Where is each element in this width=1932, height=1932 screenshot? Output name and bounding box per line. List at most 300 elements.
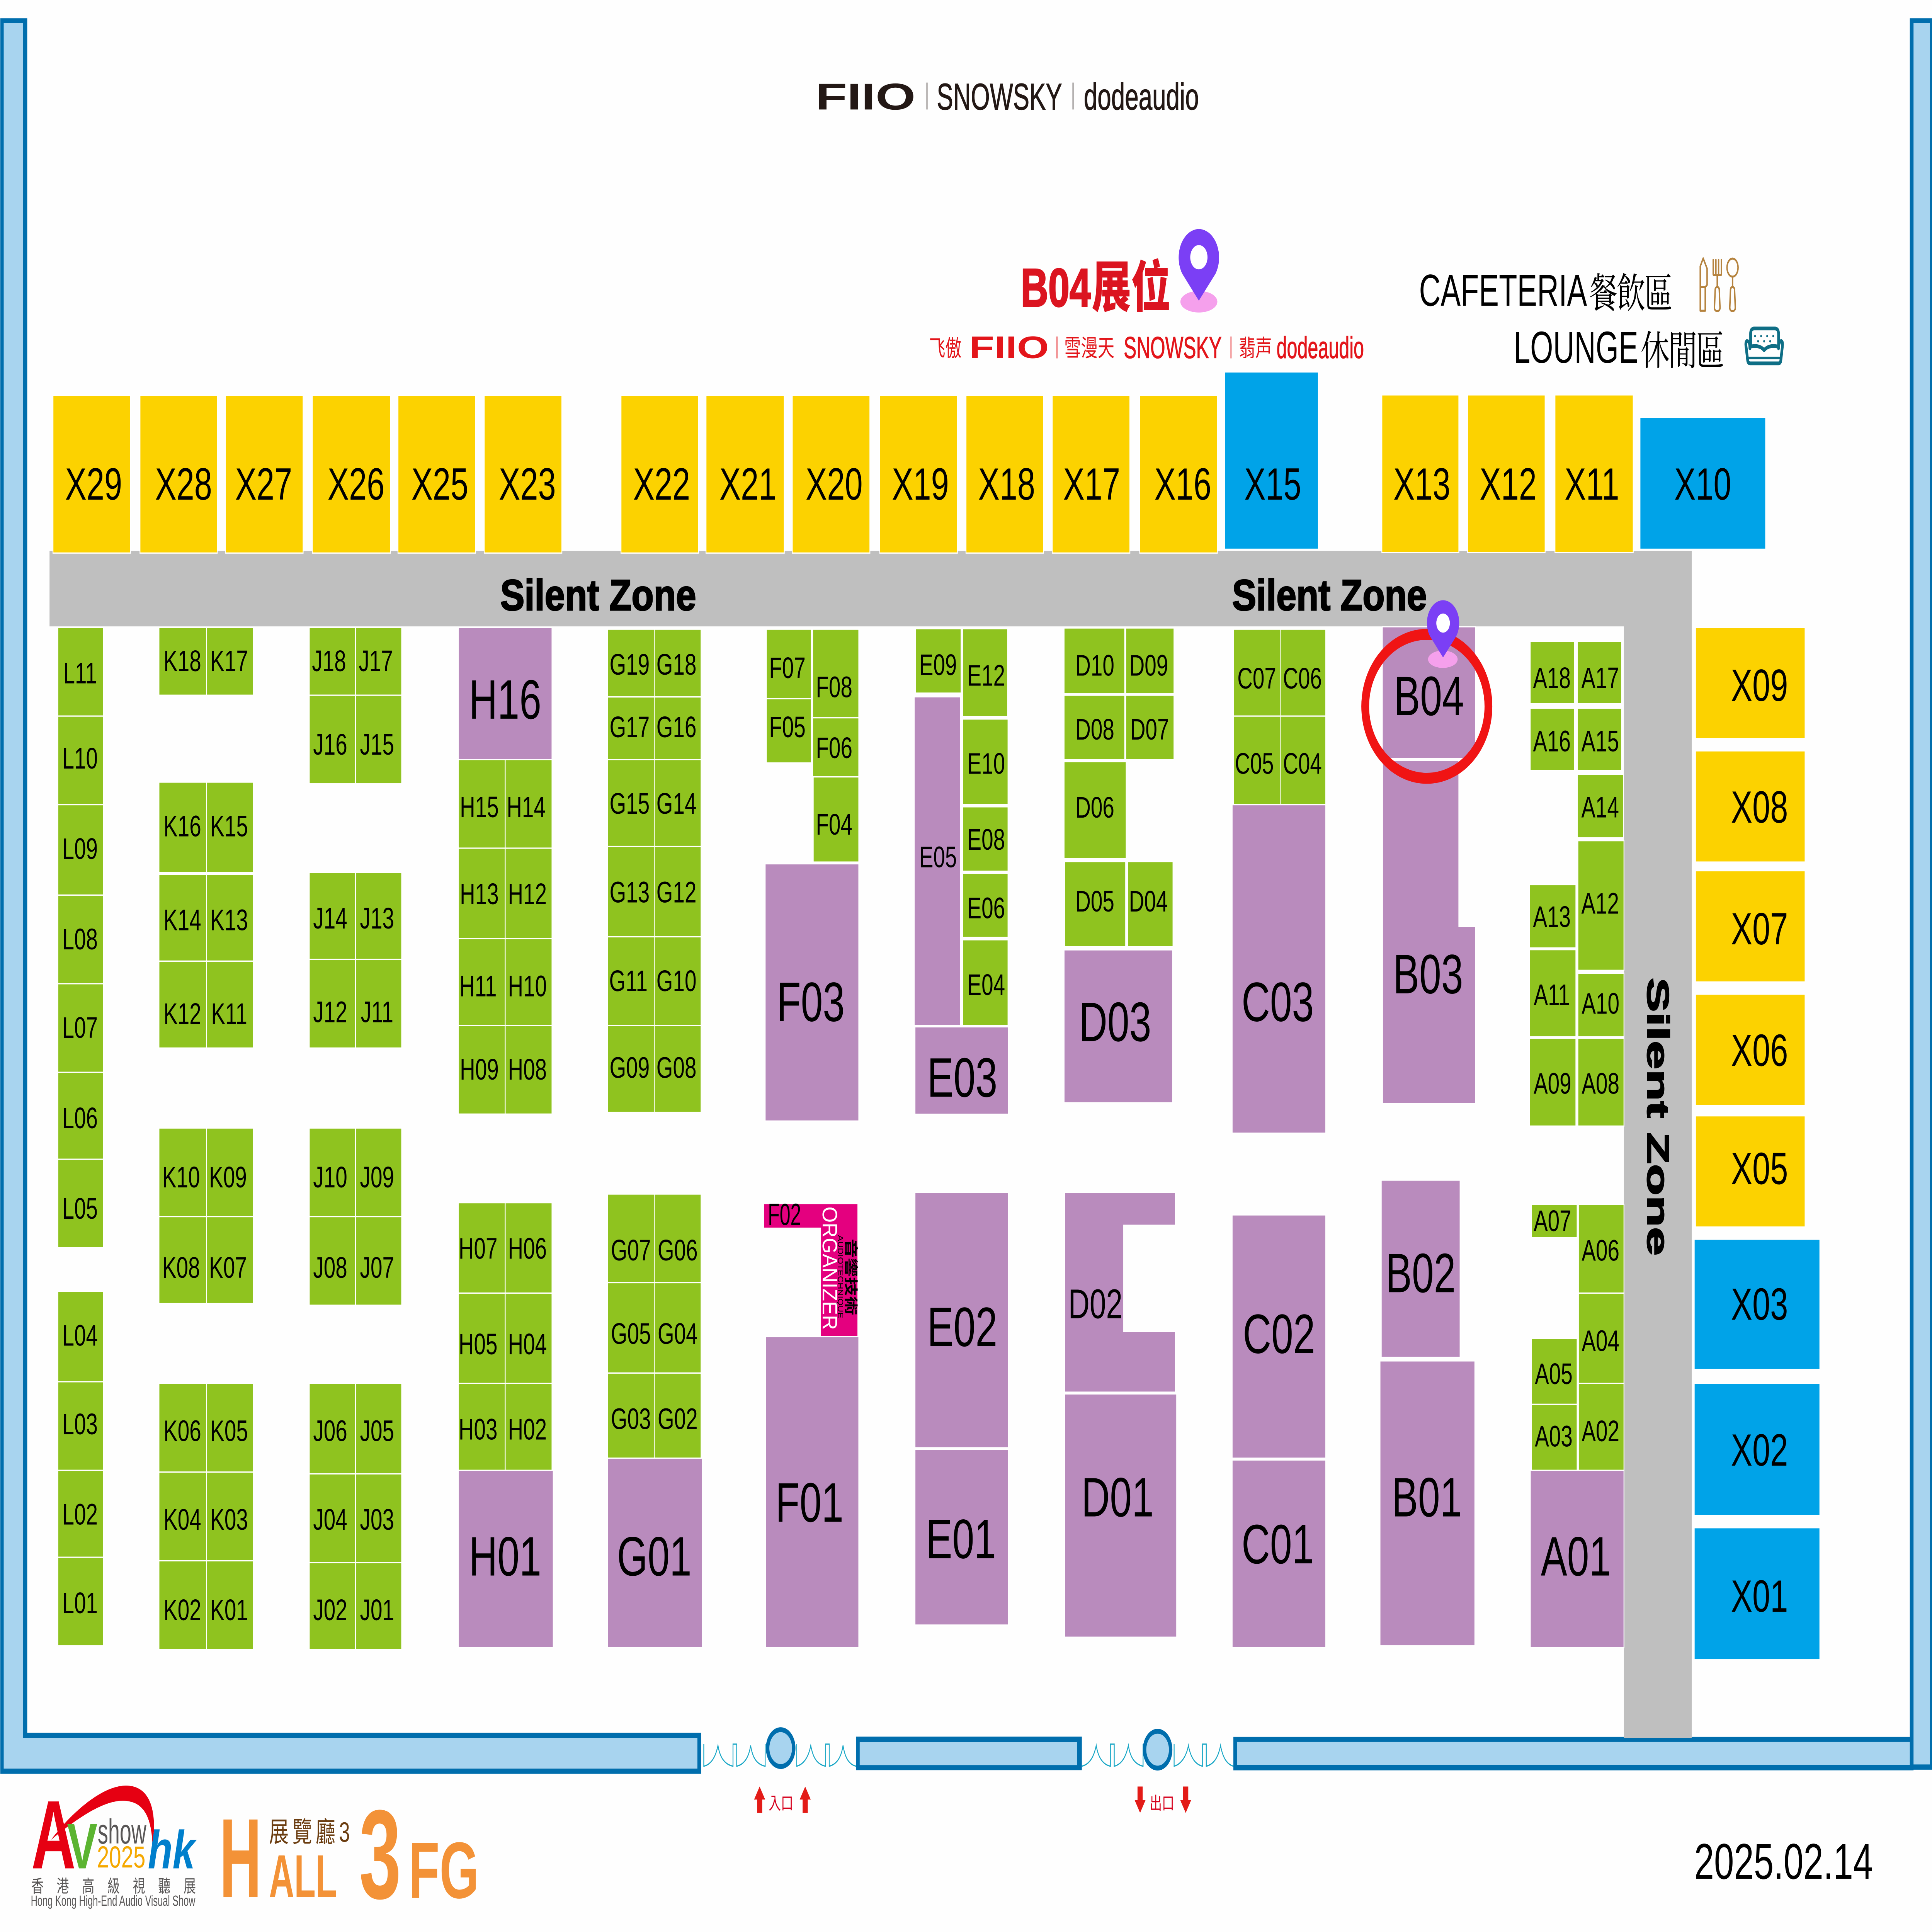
booth E09: E09 [919, 648, 957, 682]
booth J01: J01 [360, 1594, 394, 1627]
booth D06 [1064, 762, 1126, 859]
booth L07 [58, 984, 104, 1072]
booth K18 [159, 628, 206, 695]
booth G11: G11 [609, 964, 648, 998]
booth A01: A01 [1541, 1526, 1611, 1588]
brand logos heading [816, 76, 1199, 117]
exit label with down arrows [1134, 1787, 1191, 1813]
entrance label with up arrows [754, 1787, 811, 1813]
booth A13: A13 [1533, 900, 1571, 934]
booth X28: X28 [155, 459, 212, 510]
booth G15: G15 [610, 787, 650, 820]
booth K06 [159, 1383, 206, 1472]
legend: lounge: LOUNGE [1514, 323, 1638, 373]
booth G05: G05 [611, 1317, 651, 1350]
booth G16 [654, 697, 701, 760]
booth J10: J10 [313, 1161, 347, 1194]
booth F05: F05 [769, 711, 806, 744]
booth E12: E12 [968, 659, 1005, 692]
booth K01: K01 [210, 1594, 248, 1627]
booth H05: H05 [459, 1328, 498, 1361]
booth L04: L04 [63, 1319, 98, 1352]
booth K09: K09 [209, 1161, 247, 1194]
booth J11 [355, 959, 402, 1048]
booth X13 [1382, 395, 1459, 553]
booth X29: X29 [65, 459, 122, 510]
booth H14: H14 [507, 791, 546, 824]
booth D02 [1065, 1192, 1175, 1392]
booth E06: E06 [968, 892, 1005, 925]
booth K08 [159, 1217, 206, 1304]
booth A14 [1577, 774, 1624, 838]
booth H12 [505, 848, 552, 939]
logo: AV show 2025 hk [31, 1781, 197, 1909]
booth F05 [766, 699, 811, 763]
booth H01 [458, 1470, 553, 1648]
legend: cafeteria: CAFETERIA [1419, 266, 1587, 316]
booth E03 [915, 1027, 1009, 1114]
booth H13 [458, 848, 505, 939]
booth F07: F07 [769, 651, 806, 685]
booth L01: L01 [63, 1587, 98, 1620]
booth L05: L05 [63, 1192, 98, 1225]
booth H14 [505, 760, 552, 848]
booth D05 [1065, 862, 1126, 947]
booth J15: J15 [360, 728, 394, 761]
booth A02 [1578, 1383, 1624, 1470]
booths: column H [458, 628, 553, 1648]
booth H04 [505, 1293, 552, 1383]
booth G02 [654, 1373, 701, 1458]
booth H02: H02 [508, 1413, 547, 1446]
booth H13: H13 [460, 878, 499, 911]
booth L10 [58, 716, 104, 805]
booth X25: X25 [412, 459, 468, 510]
booth X03 [1694, 1239, 1820, 1369]
booth J03: J03 [360, 1503, 394, 1536]
booth F08: F08 [816, 670, 852, 704]
booth B02: B02 [1386, 1242, 1456, 1304]
booth G11 [607, 937, 654, 1026]
booth J13 [355, 872, 402, 959]
booth J06 [309, 1383, 355, 1474]
booth A14: A14 [1581, 791, 1619, 824]
booth C01: C01 [1242, 1514, 1314, 1575]
booths: column A [1530, 641, 1624, 1648]
booth K17 [206, 628, 253, 695]
booth E12 [963, 629, 1007, 717]
booth L09 [58, 805, 104, 895]
booth L03: L03 [63, 1408, 98, 1441]
red brand line: 翡声 [1239, 336, 1272, 362]
booth E08 [963, 807, 1008, 871]
booth H06: H06 [508, 1232, 547, 1265]
booths: column D [1064, 628, 1177, 1637]
booth E02: E02 [927, 1296, 997, 1358]
booth L06: L06 [63, 1102, 98, 1135]
booths: column K [159, 628, 253, 1650]
booth K08: K08 [162, 1251, 200, 1284]
booth X16: X16 [1154, 459, 1211, 510]
booth J12: J12 [313, 996, 347, 1029]
logo: AV show 2025 hk: show [98, 1812, 146, 1851]
heading: Hall 3FG: 展覽廳3 [269, 1817, 350, 1848]
booth X27: X27 [235, 459, 292, 510]
booth K12: K12 [163, 997, 201, 1031]
booth K05: K05 [210, 1415, 248, 1448]
booth G03: G03 [611, 1402, 651, 1436]
booth G16: G16 [656, 711, 696, 744]
aisle: silent zone corridor [49, 551, 1692, 1738]
booth C05 [1233, 716, 1280, 805]
booth G18 [654, 629, 701, 697]
booth L04 [58, 1291, 104, 1382]
logo: AV show 2025 hk: V [67, 1810, 97, 1882]
booth X17: X17 [1063, 459, 1120, 510]
booth X15 [1225, 372, 1318, 549]
booth X07 [1696, 871, 1805, 982]
booth K14 [159, 874, 206, 961]
booth J16 [309, 695, 355, 784]
booth E04: E04 [968, 968, 1005, 1002]
booth B02 [1381, 1180, 1460, 1357]
red brand line: dodeaudio [1277, 331, 1364, 365]
booth B03: B03 [1393, 943, 1463, 1005]
booth C02 [1232, 1215, 1326, 1458]
booth X22: X22 [633, 459, 690, 510]
booth E10: E10 [968, 747, 1005, 781]
booth X06 [1696, 994, 1805, 1105]
booth H08 [505, 1026, 552, 1114]
booth G10: G10 [656, 964, 696, 998]
booth X12: X12 [1480, 459, 1537, 510]
brand logos heading: FIIO [816, 76, 915, 117]
booth X09: X09 [1731, 660, 1788, 711]
booth A11 [1530, 950, 1576, 1037]
booth C07: C07 [1237, 662, 1276, 695]
booth H16 [458, 628, 552, 760]
booth X13: X13 [1393, 459, 1451, 510]
booth L09: L09 [63, 832, 98, 866]
booth H03 [458, 1383, 505, 1470]
booth X02 [1694, 1383, 1820, 1515]
booth X05: X05 [1731, 1144, 1788, 1194]
booth K04: K04 [163, 1503, 201, 1536]
booth K01 [206, 1561, 253, 1650]
heading: Hall 3FG: ALL [269, 1842, 337, 1910]
booth X11: X11 [1565, 459, 1619, 510]
booth A18: A18 [1533, 662, 1571, 695]
booth L10: L10 [63, 742, 98, 775]
booth X21: X21 [719, 459, 776, 510]
booth L02: L02 [63, 1498, 98, 1531]
booths: column B [1380, 627, 1476, 1646]
booth D02: D02 [1068, 1281, 1122, 1327]
booth K10 [159, 1128, 206, 1217]
booth B01 [1380, 1361, 1475, 1646]
booth E10 [963, 719, 1008, 804]
booth D09 [1126, 628, 1174, 694]
booth D03: D03 [1079, 991, 1151, 1053]
booth G09: G09 [610, 1051, 650, 1085]
booth A15 [1577, 708, 1621, 770]
booth J09 [355, 1128, 402, 1217]
booth A02: A02 [1582, 1415, 1619, 1448]
booth J07: J07 [360, 1251, 394, 1284]
booth A15: A15 [1581, 724, 1619, 758]
booth K03 [206, 1472, 253, 1561]
booth E01: E01 [926, 1508, 996, 1570]
booth E03: E03 [927, 1047, 997, 1109]
booth F03: F03 [777, 971, 845, 1033]
booth K16 [159, 782, 206, 872]
booth X10: X10 [1674, 459, 1731, 510]
red brand line: 雪漫天 [1064, 335, 1114, 362]
booth H02 [505, 1383, 552, 1470]
booth X18 [966, 395, 1044, 553]
booth G15 [607, 760, 654, 847]
booth J16: J16 [313, 728, 347, 761]
booth H10: H10 [508, 969, 547, 1003]
booth X08 [1696, 751, 1805, 862]
booth J04: J04 [313, 1503, 347, 1536]
booth F06: F06 [816, 731, 852, 765]
booth H11: H11 [459, 969, 497, 1003]
booth X27 [226, 395, 303, 553]
booth F01: F01 [776, 1472, 844, 1534]
booth H16: H16 [469, 669, 541, 731]
booth F04 [813, 777, 859, 862]
booth A17 [1577, 641, 1621, 704]
booth D06: D06 [1075, 791, 1114, 824]
booth L07: L07 [63, 1011, 98, 1045]
booth G19: G19 [610, 648, 650, 681]
booth K03: K03 [210, 1503, 248, 1536]
booth J03 [355, 1474, 402, 1563]
booth E01 [915, 1449, 1009, 1625]
booth G08: G08 [656, 1051, 696, 1085]
booth D07 [1126, 695, 1174, 760]
legend: cafeteria: 餐飲區 [1589, 261, 1673, 320]
booth C04 [1280, 716, 1326, 805]
date stamp: 2025.02.14 [1694, 1833, 1873, 1889]
booth H09 [458, 1026, 505, 1114]
booth H03: H03 [459, 1413, 498, 1446]
booth D10 [1064, 628, 1125, 694]
booths: column F [765, 629, 859, 1648]
booth K13 [206, 874, 253, 961]
red brand line: SNOWSKY [1124, 331, 1222, 365]
booth A09 [1530, 1038, 1576, 1126]
icon: small location pin [1427, 600, 1459, 668]
booth H15 [458, 760, 505, 848]
booth A05 [1532, 1338, 1577, 1404]
booth L08 [58, 895, 104, 984]
booth H12: H12 [508, 878, 547, 911]
exhibitor booths: right column X [1694, 628, 1820, 1660]
booth G07: G07 [611, 1234, 651, 1267]
booth J07 [355, 1217, 402, 1305]
booth E04 [963, 940, 1008, 1026]
booth X09 [1696, 628, 1805, 739]
booth X16 [1140, 395, 1218, 553]
booth K02 [159, 1561, 206, 1650]
booth L02 [58, 1470, 104, 1557]
logo: AV show 2025 hk: 香港高級視聽展 [31, 1877, 196, 1896]
booth X17 [1052, 395, 1130, 553]
booth L11: L11 [63, 656, 97, 690]
logo: AV show 2025 hk: 2025 [97, 1840, 145, 1874]
booth X20: X20 [806, 459, 863, 510]
booth H08: H08 [508, 1053, 547, 1086]
booth A10 [1578, 973, 1624, 1037]
booth A03: A03 [1535, 1420, 1573, 1453]
booth J17: J17 [359, 645, 393, 678]
booth G18: G18 [656, 648, 696, 681]
booth G13: G13 [610, 876, 650, 909]
booth G07 [607, 1194, 654, 1283]
booth K18: K18 [163, 645, 201, 678]
booth F06 [813, 718, 859, 777]
booth X21 [706, 395, 784, 553]
booth X02: X02 [1731, 1425, 1788, 1476]
booths: column J [309, 628, 402, 1650]
booth J08 [309, 1217, 355, 1305]
booth D08 [1064, 695, 1125, 760]
logo: AV show 2025 hk: hk [148, 1820, 197, 1880]
booth H10 [505, 939, 552, 1026]
booth K04 [159, 1472, 206, 1561]
booth X11 [1555, 395, 1633, 553]
booth F07 [766, 629, 811, 699]
booth X26 [312, 395, 391, 553]
booth G17 [607, 697, 654, 760]
booth E06 [963, 873, 1008, 937]
booth K12 [159, 961, 206, 1048]
legend: cafeteria [1419, 261, 1673, 320]
legend: lounge [1514, 319, 1725, 377]
booth J14 [309, 872, 355, 959]
booth J02: J02 [313, 1594, 347, 1627]
booth E09 [915, 629, 961, 693]
booth K05 [206, 1383, 253, 1472]
booth G17: G17 [610, 711, 650, 744]
booth K11: K11 [211, 997, 247, 1031]
booth J12 [309, 959, 355, 1048]
booth G06 [654, 1194, 701, 1283]
organizer booth F02: F02 [768, 1198, 801, 1232]
booth A03 [1532, 1404, 1577, 1470]
booth F08 [813, 629, 859, 718]
booth A13 [1530, 884, 1576, 948]
logo: AV show 2025 hk: Hong Kong High-End Audio Visual Show [31, 1893, 195, 1909]
booth C03 [1232, 805, 1326, 1133]
heading: Hall 3FG: FG [408, 1826, 479, 1915]
booth H09: H09 [460, 1053, 499, 1086]
booth A01 [1530, 1470, 1624, 1648]
heading: B04 booth [1021, 257, 1170, 319]
booths: column L [58, 628, 104, 1646]
booth J01 [355, 1563, 402, 1650]
organizer booth F02: 音響技術 [843, 1239, 858, 1315]
booth L08: L08 [63, 923, 98, 956]
booth G14: G14 [656, 787, 696, 820]
booth B04 highlighted: B04 [1394, 665, 1464, 727]
booth X01: X01 [1731, 1571, 1788, 1621]
booth D04 [1128, 862, 1173, 947]
booth D09: D09 [1129, 649, 1168, 682]
booth A05: A05 [1535, 1357, 1573, 1391]
booth K13: K13 [210, 903, 248, 937]
icon: knife fork spoon [1700, 259, 1738, 311]
heading: Hall 3FG [219, 1784, 479, 1925]
booth E05: E05 [919, 840, 957, 874]
heading: Hall 3FG: 3 [359, 1784, 401, 1925]
booth G05 [607, 1283, 654, 1373]
booth K15 [206, 782, 253, 872]
booth X19 [880, 395, 957, 553]
booth G02: G02 [658, 1402, 698, 1436]
booth C01 [1232, 1460, 1326, 1648]
booth J18 [309, 628, 355, 695]
booth F03 [765, 864, 859, 1121]
booth A09: A09 [1534, 1067, 1571, 1100]
booth G04: G04 [658, 1317, 698, 1350]
booth K14: K14 [163, 903, 201, 937]
booth J08: J08 [313, 1251, 347, 1284]
booth X18: X18 [978, 459, 1035, 510]
booth B03 [1383, 760, 1476, 1104]
booth G03 [607, 1373, 654, 1458]
booth G09 [607, 1026, 654, 1112]
organizer booth F02: ORGANIZER [818, 1207, 841, 1330]
booth A16: A16 [1533, 724, 1571, 758]
booth X06: X06 [1731, 1026, 1788, 1076]
booth C02: C02 [1243, 1303, 1315, 1365]
booth X05 [1696, 1116, 1805, 1227]
booth X10 [1640, 417, 1766, 549]
booth F04: F04 [816, 808, 852, 841]
label: silent zone left: Silent Zone [500, 571, 696, 619]
exhibitor booths: top row X [53, 372, 1766, 553]
booth A04 [1578, 1293, 1624, 1383]
booth X03: X03 [1731, 1279, 1788, 1330]
entrance door with pillar [704, 1730, 856, 1767]
booth E05 [914, 697, 961, 1026]
booth H07 [458, 1203, 505, 1293]
booths: column G [607, 629, 702, 1648]
booth A08: A08 [1582, 1067, 1619, 1100]
booth G01 [607, 1458, 702, 1648]
red brand line: 飞傲 [929, 335, 962, 361]
booth H06 [505, 1203, 552, 1293]
booth A06: A06 [1582, 1234, 1619, 1267]
outer wall: bottom right and right side [1233, 18, 1932, 1770]
booth L05 [58, 1159, 104, 1248]
red circle around B04 [1365, 634, 1488, 778]
organizer booth F02 [764, 1198, 858, 1336]
booth A16 [1530, 708, 1575, 770]
heading: B04 booth: B04 [1021, 258, 1091, 318]
booth A18 [1530, 641, 1575, 704]
booth J11: J11 [361, 996, 393, 1029]
heading: Hall 3FG: H [219, 1795, 262, 1921]
booth K02: K02 [163, 1594, 201, 1627]
booth G04 [654, 1283, 701, 1373]
booth X08: X08 [1731, 782, 1788, 832]
logo: AV show 2025 hk: A [31, 1781, 76, 1889]
booth A17: A17 [1581, 662, 1619, 695]
